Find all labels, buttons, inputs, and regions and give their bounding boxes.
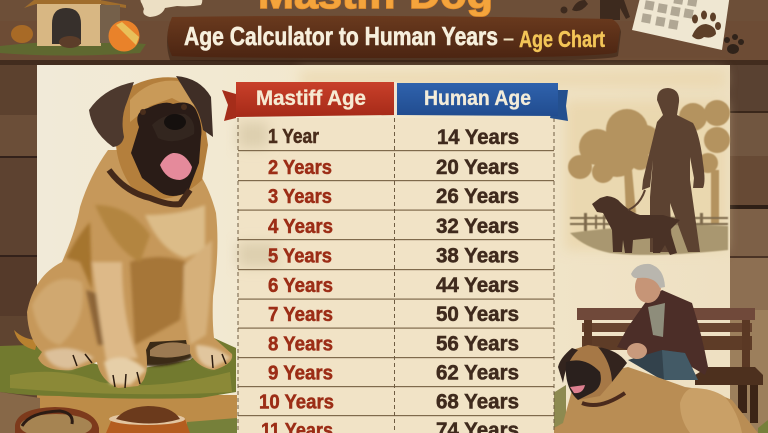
dog eyes: [140, 109, 146, 115]
age table: [222, 82, 568, 433]
right column: human ages: 56 Years: [436, 332, 519, 356]
muzzle: [566, 360, 601, 400]
dog tongue: [160, 153, 192, 180]
right column: human ages: 38 Years: [436, 244, 519, 268]
hand: [627, 343, 647, 359]
fence: [570, 213, 728, 231]
dog paw toes: [73, 354, 226, 388]
head: [635, 271, 661, 303]
right column: human ages: [436, 126, 519, 433]
decoration: silhouettes top right: [560, 0, 630, 20]
header: mastiff age: [222, 82, 396, 121]
left column: mastiff ages: 3 Years: [268, 185, 332, 208]
icon: small paw print: [724, 34, 744, 54]
left column: mastiff ages: 8 Years: [268, 332, 333, 356]
paper panel: [37, 65, 730, 433]
dog nose: [164, 114, 186, 130]
dog head: [115, 77, 208, 199]
right column: human ages: 44 Years: [436, 274, 519, 297]
man silhouette: [642, 88, 704, 252]
illustration: man and dog silhouette with trees: [568, 88, 730, 255]
icon: calendar with paw: [632, 0, 730, 50]
dog collar: [109, 170, 190, 204]
decoration: dog house with grass: [0, 0, 146, 56]
left column: mastiff ages: 10 Years: [259, 390, 334, 414]
subtitle banner: Age Calculator to Human Years: [184, 21, 498, 51]
left column: mastiff ages: 4 Years: [268, 215, 333, 238]
dog ears: [89, 82, 134, 147]
left column: mastiff ages: 5 Years: [268, 244, 332, 268]
leash: [628, 190, 645, 210]
dog body: [27, 150, 232, 388]
dog forehead: [130, 81, 195, 122]
dog body shading: [32, 205, 231, 385]
trees: [568, 100, 730, 225]
table body: [238, 118, 554, 433]
hair: [631, 264, 665, 288]
right column: human ages: 20 Years: [436, 156, 519, 179]
right column: human ages: 26 Years: [436, 185, 519, 208]
subtitle banner: [167, 16, 621, 62]
left column: mastiff ages: 2 Years: [268, 156, 332, 179]
left column: mastiff ages: 7 Years: [268, 303, 333, 326]
illustration: big mastiff sitting: [14, 76, 232, 388]
shirt: [648, 303, 665, 337]
icon: ball: [108, 20, 140, 52]
dog silhouette: [592, 196, 680, 255]
grass: [548, 385, 566, 428]
paper tint: [300, 70, 725, 250]
illustration: old man: [617, 264, 708, 380]
jeans: [628, 350, 698, 380]
right column: human ages: 50 Years: [436, 303, 519, 326]
illustration: bench: [577, 308, 763, 423]
right column: human ages: 32 Years: [436, 215, 519, 238]
jacket: [617, 290, 708, 375]
dog mask: [131, 102, 201, 196]
grass bottom right: [758, 420, 768, 433]
subtitle banner: Age Chart: [519, 26, 605, 52]
illustration: lying mastiff: [545, 345, 758, 433]
haunch: [680, 388, 742, 433]
right column: human ages: 14 Years: [437, 126, 519, 149]
left column: mastiff ages: [259, 125, 334, 433]
left column: mastiff ages: 9 Years: [268, 362, 333, 384]
head: [566, 345, 613, 400]
dog muzzle top: [152, 114, 194, 141]
illustration: ground and grass: [0, 338, 237, 433]
body: [545, 367, 758, 433]
collar: [582, 393, 625, 405]
tongue: [570, 385, 585, 393]
dog rear paw: [150, 342, 190, 358]
header: human age: Human Age: [424, 87, 531, 110]
ground: [570, 225, 728, 255]
icon: bone: [140, 0, 202, 17]
left column: mastiff ages: 1 Year: [268, 125, 319, 148]
header: human age: [394, 82, 568, 121]
right column: human ages: 62 Years: [436, 362, 519, 384]
right column: human ages: 68 Years: [436, 390, 519, 414]
dog shadow: [77, 338, 192, 366]
dog tail: [14, 330, 38, 350]
left column: mastiff ages: 6 Years: [268, 274, 333, 297]
ears: [558, 347, 627, 383]
subtitle banner: –: [503, 28, 514, 50]
illustration: food bowls: [15, 406, 190, 433]
row lines: [238, 150, 554, 416]
header: mastiff age: Mastiff Age: [256, 87, 366, 110]
